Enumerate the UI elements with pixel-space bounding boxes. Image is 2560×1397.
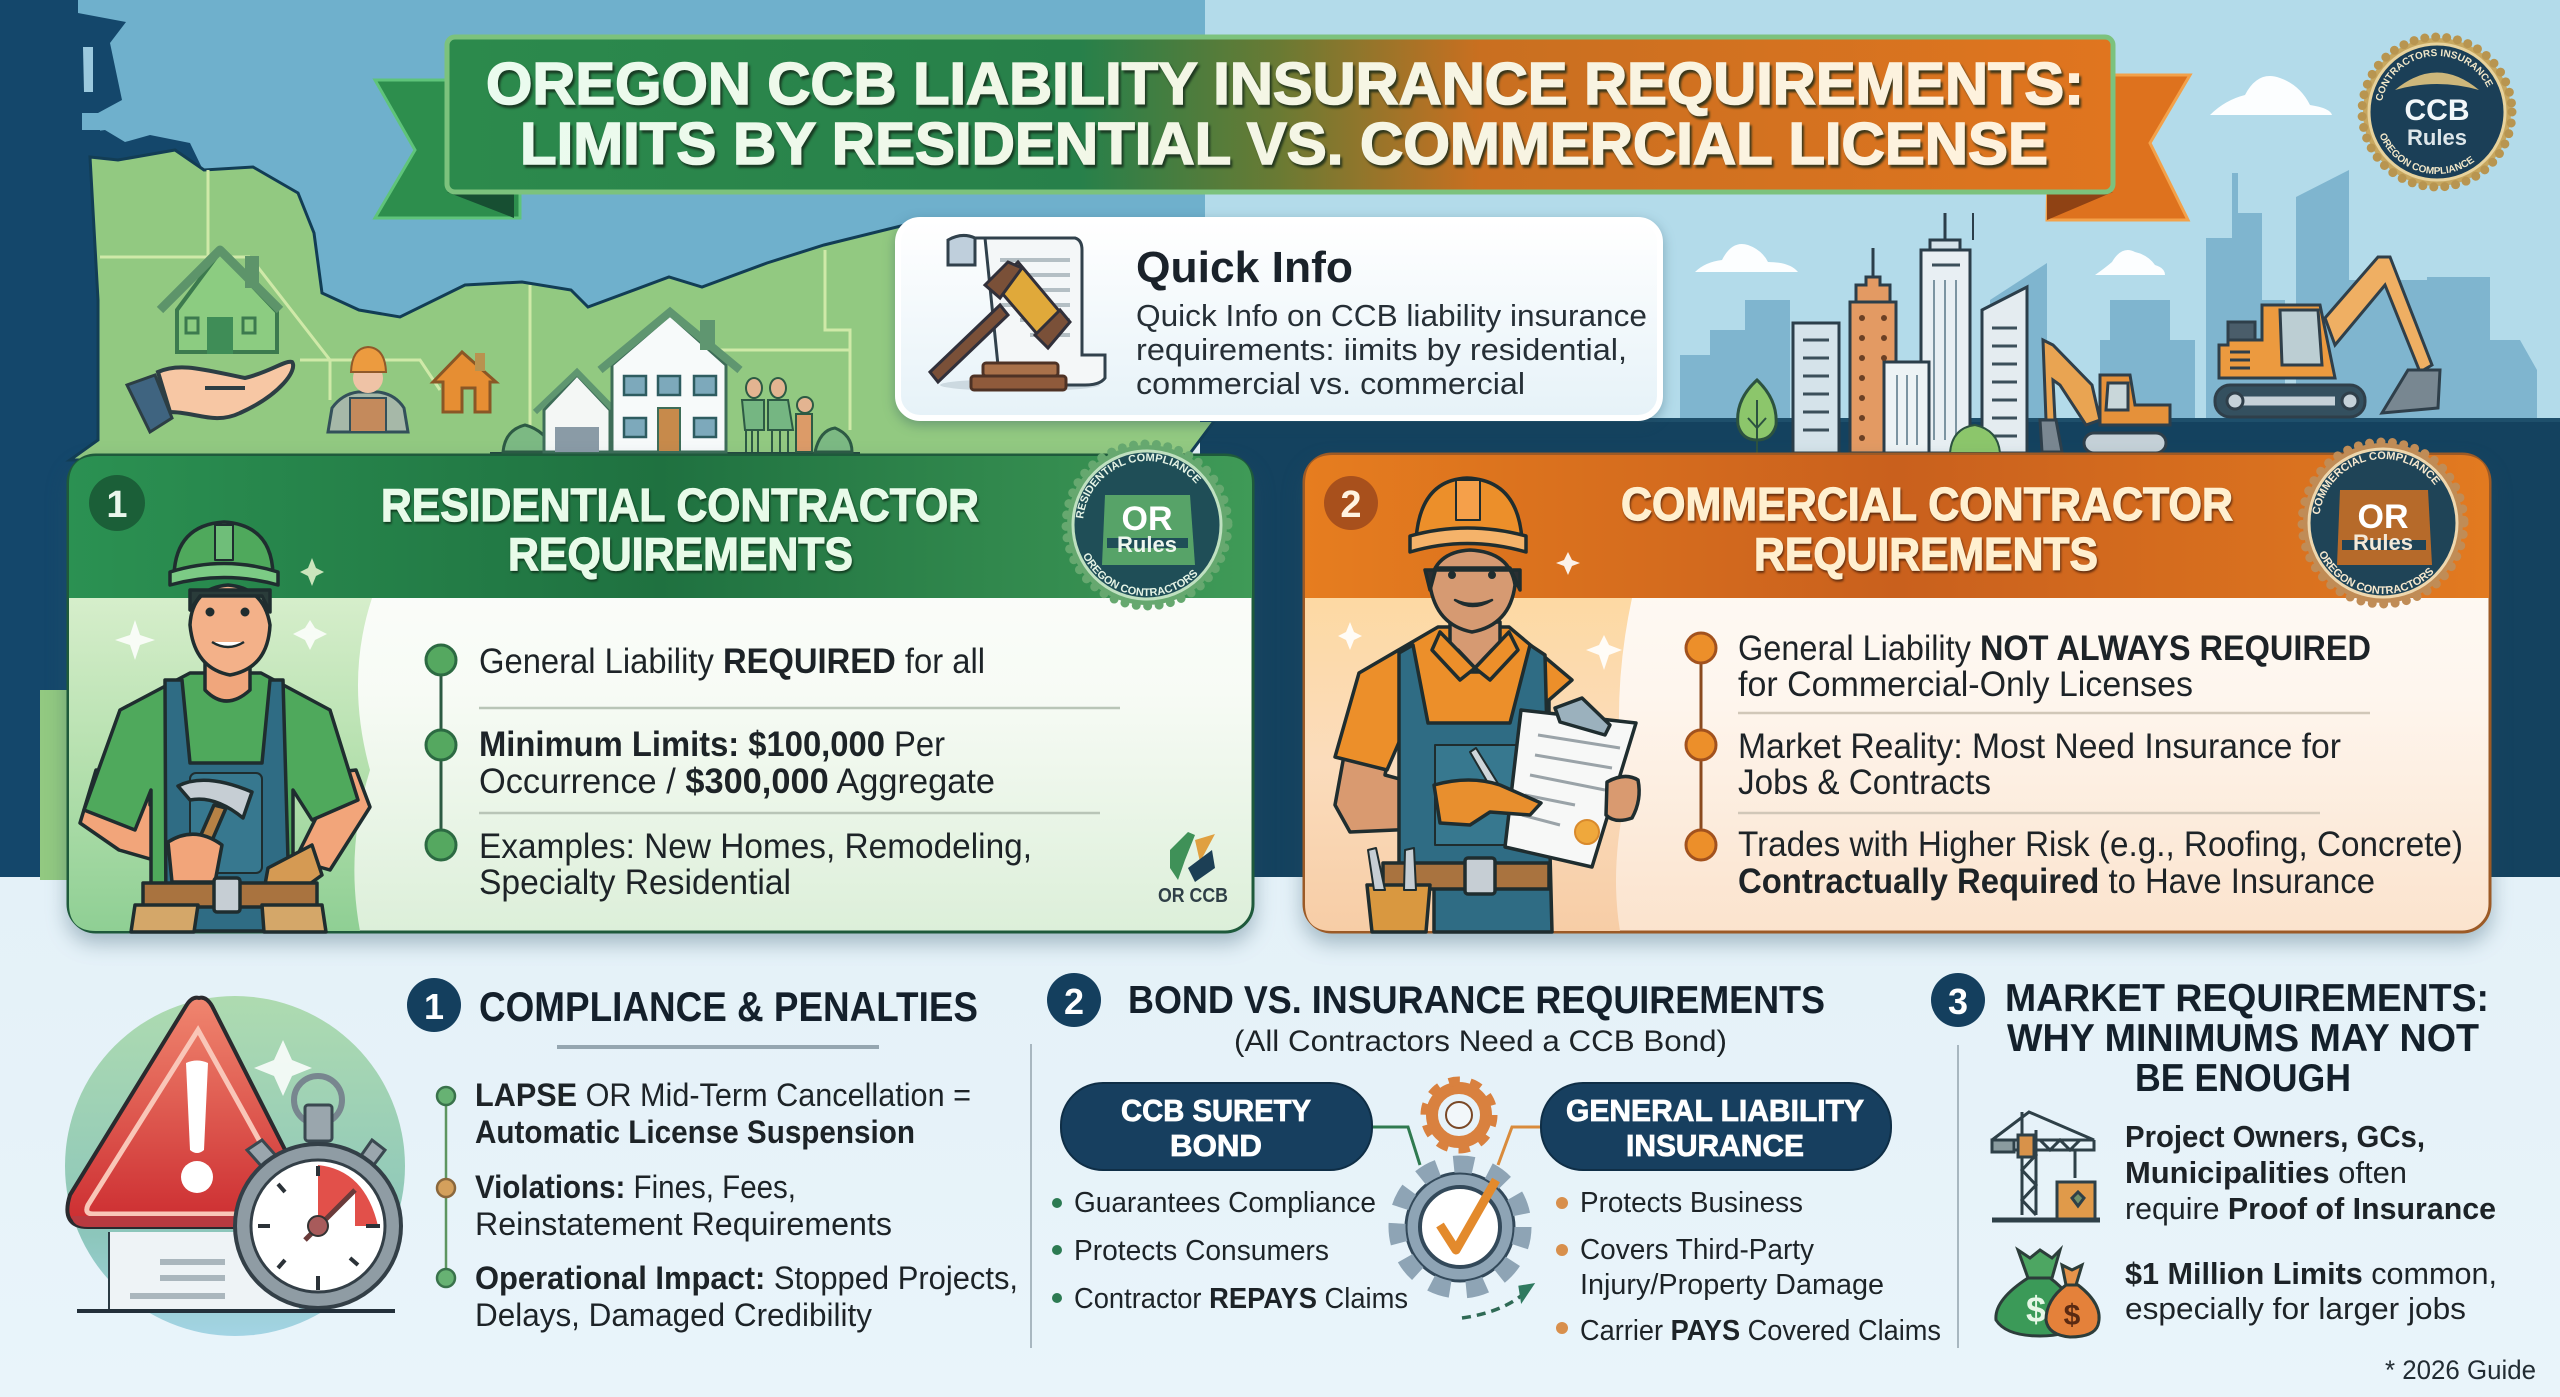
text: one million limits: especially for larger jobs xyxy=(2125,1291,2466,1326)
arrow: dashed curved xyxy=(1462,1285,1532,1318)
title ribbon xyxy=(375,37,2190,220)
number badge: 2 xyxy=(1340,484,1362,526)
title text: LIMITS BY RESIDENTIAL VS. COMMERCIAL LICENSE xyxy=(520,111,2048,177)
text: residential requirements: Examples: New Homes, Remodeling, xyxy=(479,827,1032,866)
heading text: RESIDENTIAL CONTRACTOR xyxy=(381,479,979,531)
map of Oregon xyxy=(40,150,1215,880)
seal: OR Rules gold: COMMERCIAL COMPLIANCE xyxy=(2312,451,2440,514)
seal: OR Rules green: OR xyxy=(1122,500,1172,538)
city buildings xyxy=(1793,213,2027,453)
text: commercial requirements: Jobs & Contracts xyxy=(1738,763,1991,802)
number badge xyxy=(1931,973,1985,1027)
seal: CCB Rules: OREGON COMPLIANCE xyxy=(2380,133,2474,174)
timeline bullets xyxy=(437,1087,455,1287)
seal: CCB Rules: CCB xyxy=(2404,94,2470,127)
logo: OR CCB xyxy=(1158,832,1228,907)
text: quick info body: requirements: iimits by residential, xyxy=(1136,332,1627,367)
bullets: liability insurance: Injury/Property Damage xyxy=(1580,1269,1884,1301)
text: penalties: Operational Impact: Stopped Projects, xyxy=(475,1260,1018,1296)
section: market requirements xyxy=(1931,973,2497,1337)
title text xyxy=(486,51,2084,177)
icon: green house xyxy=(160,250,280,354)
bullets: liability insurance: Covers Third-Party xyxy=(1580,1234,1814,1266)
seal: OR Rules gold: Rules xyxy=(2353,530,2413,555)
icon: gavel and scroll xyxy=(930,235,1105,391)
icon: small excavator xyxy=(2040,340,2170,453)
seal: CCB Rules: Rules xyxy=(2407,125,2467,150)
seal: CCB Rules: CONTRACTORS INSURANCE xyxy=(2376,49,2494,100)
bullets: surety bond: Protects Consumers xyxy=(1074,1235,1329,1267)
text: penalties: Violations: Fines, Fees, xyxy=(475,1169,796,1205)
heading: BOND VS. INSURANCE REQUIREMENTS xyxy=(1128,979,1825,1022)
heading: COMPLIANCE & PENALTIES xyxy=(479,983,978,1030)
sparkles xyxy=(1338,552,1622,670)
heading text xyxy=(381,479,979,580)
icon: money bags: $ xyxy=(2026,1289,2046,1330)
timeline bullets xyxy=(426,645,1120,860)
seal: OR Rules green: OREGON CONTRACTORS xyxy=(1084,553,1198,596)
seal: OR Rules green: RESIDENTIAL COMPLIANCE xyxy=(1076,453,1202,518)
ribbon body xyxy=(447,37,2113,192)
text: one million limits: $1 Million Limits common, xyxy=(2125,1256,2497,1291)
heading: MARKET REQUIREMENTS: xyxy=(2005,977,2489,1020)
text: penalties xyxy=(475,1077,1018,1333)
text: residential requirements: General Liability REQUIRED for all xyxy=(479,642,985,681)
logo: OR CCB: OR CCB xyxy=(1158,885,1228,907)
number badge xyxy=(1047,973,1101,1027)
text: quick info body xyxy=(1136,298,1647,401)
text: proof of insurance: Project Owners, GCs, xyxy=(2125,1119,2425,1154)
section dividers xyxy=(1031,1044,1958,1348)
text: commercial requirements: for Commercial-Only Licenses xyxy=(1738,665,2193,704)
text: residential requirements xyxy=(479,642,1032,902)
illustration: houses and family xyxy=(490,312,860,456)
panel: quick info xyxy=(898,220,1660,418)
text: residential requirements: Occurrence / $300,000 Aggregate xyxy=(479,762,995,801)
icon: money bags xyxy=(1996,1250,2099,1337)
text: commercial requirements: Contractually Required to Have Insurance xyxy=(1738,862,2375,901)
heading: quick info: Quick Info xyxy=(1136,243,1353,292)
text: residential requirements: Specialty Residential xyxy=(479,863,791,902)
trees xyxy=(1738,380,2000,453)
subheading: (All Contractors Need a CCB Bond) xyxy=(1234,1025,1727,1058)
worker: commercial contractor with clipboard xyxy=(1335,478,1639,932)
pill: general liability insurance xyxy=(1541,1083,1891,1170)
icon: money bags: $ xyxy=(2064,1299,2081,1332)
icon: large excavator xyxy=(2215,257,2440,417)
number badge: 2 xyxy=(1064,981,1084,1022)
section: bond vs insurance xyxy=(1047,973,1941,1347)
icon: small orange gear xyxy=(1425,1081,1493,1149)
number badge: 1 xyxy=(424,986,444,1027)
bullets: surety bond: Guarantees Compliance xyxy=(1074,1187,1376,1219)
connectors xyxy=(1372,1127,1541,1165)
number badge xyxy=(89,475,145,531)
seal: CCB Rules xyxy=(2358,32,2516,192)
icon: warning triangle and stopwatch xyxy=(65,996,405,1336)
text: penalties: Automatic License Suspension xyxy=(475,1114,915,1150)
card header xyxy=(1305,455,2489,598)
title text: OREGON CCB LIABILITY INSURANCE REQUIREMENTS: xyxy=(486,51,2084,117)
text: quick info body: Quick Info on CCB liability insurance xyxy=(1136,298,1647,333)
bullets: liability insurance xyxy=(1556,1187,1941,1347)
worker: residential contractor with hammer xyxy=(80,522,370,932)
heading xyxy=(2005,977,2489,1100)
number badge xyxy=(1324,476,1378,530)
ribbon tails xyxy=(375,75,2190,220)
card body xyxy=(68,455,1253,932)
seal: OR Rules gold xyxy=(2298,438,2468,608)
text: commercial requirements: General Liability NOT ALWAYS REQUIRED xyxy=(1738,629,2371,668)
text: proof of insurance: Municipalities often xyxy=(2125,1155,2407,1190)
heading: WHY MINIMUMS MAY NOT xyxy=(2007,1017,2479,1060)
pill: CCB surety bond: BOND xyxy=(1170,1128,1262,1163)
seal: OR Rules gold: OREGON CONTRACTORS xyxy=(2320,551,2434,594)
text: quick info body: commercial vs. commercial xyxy=(1136,366,1525,401)
text: penalties: LAPSE OR Mid-Term Cancellation = xyxy=(475,1077,971,1113)
skyline: background silhouettes and clouds xyxy=(1200,76,2560,422)
text: penalties: Delays, Damaged Credibility xyxy=(475,1297,872,1333)
pill: general liability insurance: INSURANCE xyxy=(1626,1128,1804,1163)
icon: small orange house xyxy=(433,352,496,412)
icon: large gear with check mark xyxy=(1397,1164,1523,1290)
text: residential requirements: Minimum Limits: $100,000 Per xyxy=(479,725,945,764)
seal: OR Rules gold: OR xyxy=(2358,498,2408,536)
bullets: liability insurance: Protects Business xyxy=(1580,1187,1803,1219)
text: commercial requirements: Trades with Higher Risk (e.g., Roofing, Concrete) xyxy=(1738,825,2463,864)
bullets: surety bond xyxy=(1052,1187,1408,1315)
heading: BE ENOUGH xyxy=(2135,1057,2351,1100)
text: commercial requirements: Market Reality: Most Need Insurance for xyxy=(1738,727,2341,766)
seal: OR Rules green xyxy=(1062,440,1232,610)
pill: CCB surety bond: CCB SURETY xyxy=(1121,1093,1311,1128)
panel: residential contractor requirements xyxy=(56,440,1266,954)
heading text: COMMERCIAL CONTRACTOR xyxy=(1621,478,2233,530)
panel: commercial contractor requirements xyxy=(1292,438,2502,954)
text: proof of insurance xyxy=(2125,1119,2496,1226)
heading text xyxy=(1621,478,2233,580)
icon: crane xyxy=(1992,1112,2100,1220)
bullets: surety bond: Contractor REPAYS Claims xyxy=(1074,1283,1408,1315)
number badge: 1 xyxy=(106,484,128,526)
text: proof of insurance: require Proof of Insurance xyxy=(2125,1191,2496,1226)
number badge: 3 xyxy=(1948,981,1968,1022)
card header xyxy=(69,456,1252,598)
text: one million limits xyxy=(2125,1256,2497,1326)
icon: open hand xyxy=(127,362,293,432)
section: compliance and penalties xyxy=(65,978,1018,1336)
text: penalties: Reinstatement Requirements xyxy=(475,1206,892,1242)
pill: general liability insurance: GENERAL LIABILITY xyxy=(1566,1093,1864,1128)
footnote: * 2026 Guide xyxy=(2385,1355,2536,1385)
heading text: REQUIREMENTS xyxy=(1754,528,2098,580)
seal: OR Rules green: Rules xyxy=(1117,532,1177,557)
timeline bullets xyxy=(1686,633,2370,860)
pill: CCB surety bond xyxy=(1061,1083,1372,1170)
text: commercial requirements xyxy=(1738,629,2463,901)
icon: small worker xyxy=(328,347,408,432)
bullets: liability insurance: Carrier PAYS Covered Claims xyxy=(1580,1315,1941,1347)
heading text: REQUIREMENTS xyxy=(508,528,853,580)
card body xyxy=(1304,454,2490,932)
sparkles xyxy=(115,558,327,660)
number badge xyxy=(407,978,461,1032)
